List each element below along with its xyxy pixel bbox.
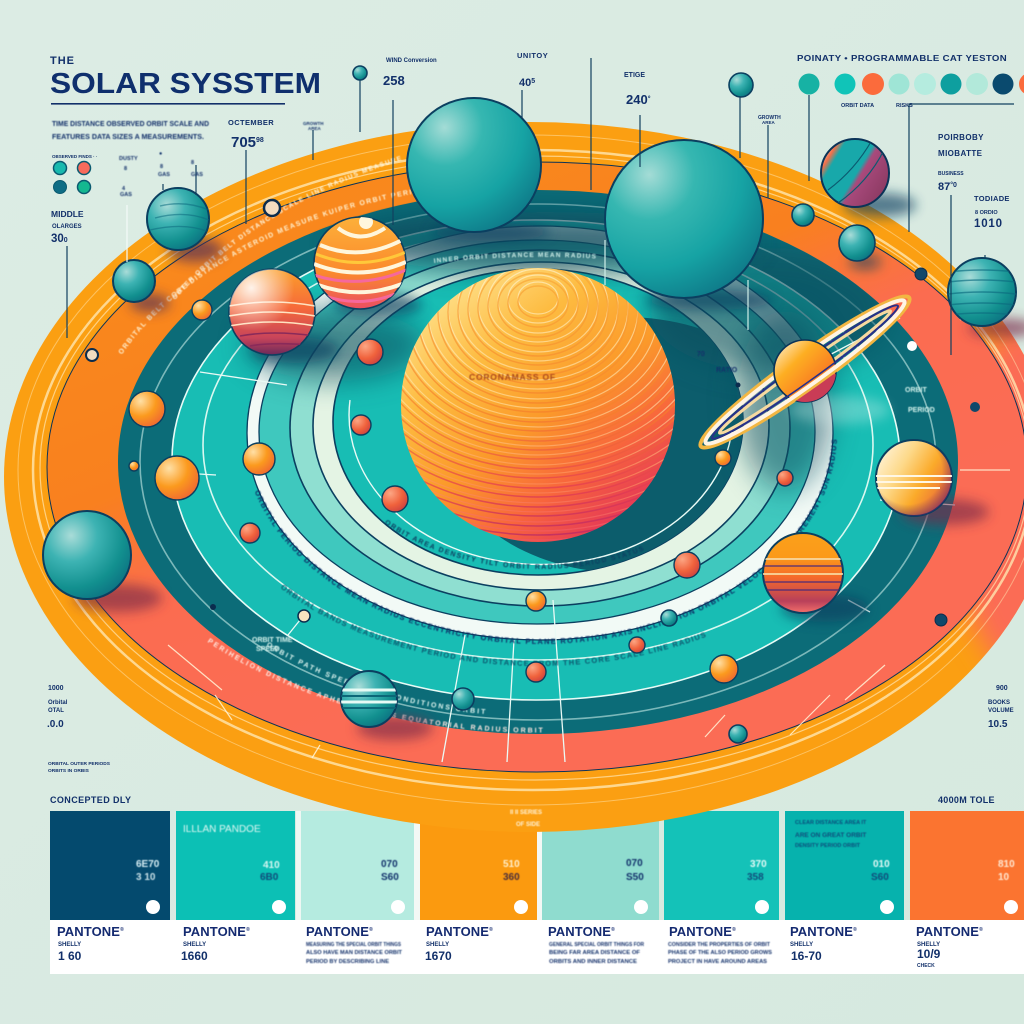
pantone labels: SHELLY [58,942,81,948]
leader lines [67,58,1014,355]
title block [50,55,321,105]
coral right edge [958,321,1024,662]
ring labels: INNER ORBIT DISTANCE MEAN RADIUS [433,252,596,264]
callout: near far right label [758,115,781,125]
lower left callout: OTAL [48,708,64,714]
planet: striped teal and magenta [821,139,889,207]
callout: 240: ETIGE [624,72,645,79]
planet: large teal lower left [43,511,131,599]
pantone labels: ORBITS AND INNER DISTANCE [549,959,637,965]
lower left callout [47,685,111,774]
swatch inner labels [183,820,867,849]
intro text: TIME DISTANCE OBSERVED ORBIT SCALE AND [52,119,210,128]
title block: SOLAR SYSSTEM [50,68,321,100]
ring labels: PERIHELION DISTANCE APHELION MASS EQUATORIAL RADIUS ORBIT [207,638,544,734]
lower right callout: 900 [996,685,1008,692]
swatch numbers: 6B0 [260,872,279,883]
pantone labels: SHELLY [917,942,940,948]
swatch numbers: 510 [503,859,520,870]
pantone labels: ALSO HAVE MAN DISTANCE ORBIT [306,950,403,956]
pantone labels: SHELLY [183,942,206,948]
panel: pantone swatch row [50,811,1024,974]
small coral moons [240,339,793,682]
pantone labels: PHASE OF THE ALSO PERIOD GROWS [668,950,772,956]
ring labels: OUTER ORBIT BELT DISTANCE SCALE LINE RADIUS MEASURE [172,155,402,300]
pantone labels: CHECK [917,963,935,969]
small ring text: ORBIT TIME [252,637,293,644]
swatch numbers: 070 [381,859,398,870]
callout: 45 [517,51,548,89]
pantone labels: 16-70 [791,949,822,963]
callout: 258: WIND Conversion [386,58,437,64]
pantone labels: PANTONE [916,924,979,939]
outer orange ring [4,122,1024,832]
soft shadows on rings [245,212,890,490]
callout: right: POIRBOBY [938,133,984,142]
pale teal ring [290,250,790,606]
inner orange and coral band [47,162,1024,772]
swatch numbers: 360 [503,872,520,883]
callout: near far right label: AREA [762,120,776,125]
bottom band ticks [510,810,542,828]
outer ring stripes [18,135,1024,805]
left data callout: MIDDLE [51,209,84,219]
swatch headings: CONCEPTED DLY [50,795,131,805]
top left icons labels: 8 [160,164,163,170]
top left icons labels: 4 [122,186,126,192]
swatch inner labels: ILLLAN PANDOE [183,824,261,835]
callout: right: MIOBATTE [938,149,983,158]
small legend: OBSERVED FINDS · · [52,154,97,159]
swatch inner labels: ARE ON GREAT ORBIT [795,832,866,839]
planet: large teal left [407,98,541,232]
pantone labels: PROJECT IN HAVE AROUND AREAS [668,959,767,965]
swatch numbers: 370 [750,859,767,870]
callout: 258: 258 [383,73,405,88]
callout: 705: 705 [231,134,256,151]
turquoise ring [172,220,900,700]
small teal moons [353,66,875,743]
pantone labels: ® [853,926,857,933]
pantone labels: ® [732,926,736,933]
pantone labels: PERIOD BY DESCRIBING LINE [306,959,389,965]
color legend top right: ORBIT DATA [841,103,874,109]
dark teal disc [118,190,958,734]
pantone labels: 1670 [425,949,452,963]
callout: 258 [383,58,437,88]
bottom band ticks: II II SERIES [510,810,542,816]
planet: small teal left [113,260,155,302]
callout: near far right label: GROWTH [758,115,781,121]
lower right callout: 10.5 [988,719,1008,730]
pantone labels: SHELLY [790,942,813,948]
swatch numbers: 10 [998,872,1010,883]
pantone labels: PANTONE [790,924,853,939]
pantone labels: ® [120,926,124,933]
lower left callout: 1000 [48,685,64,692]
band separators [168,300,1010,758]
callout: 240: ° [648,95,651,103]
sun [401,268,675,542]
swatch numbers: 010 [873,859,890,870]
planet shadows [74,193,1024,740]
left data callout: OLARGES [52,224,82,230]
small legend [52,154,97,194]
callout: right: BUSINESS [938,171,964,177]
inner turquoise [333,269,743,575]
pantone labels: 10/9 [917,947,941,961]
planet: pale orange right [876,440,952,516]
callout: right: °0 [950,181,957,189]
swatch headings [50,795,995,805]
callout: 705 [228,118,274,151]
small ring text: ORBIT [905,387,928,394]
callout: far right: 8 ORDIO [975,210,998,216]
ring labels [118,155,838,734]
title block: THE [50,55,75,67]
pantone labels: MEASURING THE SPECIAL ORBIT THINGS [306,942,401,948]
top left icons labels: AREA [308,126,322,131]
top left icons labels: GROWTH [303,121,324,126]
top left icons labels: GAS [191,172,203,178]
saturn with rings [698,294,912,450]
small ring text: SPEED [256,646,280,653]
white label band [247,226,833,640]
left data callout: 300 [51,233,68,245]
pantone labels: BEING FAR AREA DISTANCE OF [549,950,641,956]
left data callout [51,209,84,245]
swatch numbers: 358 [747,872,764,883]
lower right callout: VOLUME [988,708,1014,714]
pantone labels: PANTONE [306,924,369,939]
swatch numbers: S50 [626,872,644,883]
planet: large teal right [605,140,763,298]
pantone labels: PANTONE [548,924,611,939]
planet: banded lower right [763,533,843,613]
swatch headings: 4000M TOLE [938,795,995,805]
lower left callout: ORBITAL OUTER PERIODS [48,761,111,767]
radial spokes [165,318,955,762]
orbital system [4,122,1024,832]
ring labels: ORBIT PATH SPEED FTEE CONDITIONS ORBIT [266,642,486,714]
callout: far right: TODIADE [974,194,1010,203]
small ring text [252,351,935,653]
small ring text: PERIOD [908,407,935,414]
dark shadow around sun [498,318,743,570]
planet: teal striped right [948,258,1016,326]
pantone labels: PANTONE [669,924,732,939]
pantone labels: ® [979,926,983,933]
ring labels: ORBIT AREA DENSITY TILT ORBIT RADIUS PERIOD STATUS [385,520,644,570]
pantone labels: 1660 [181,949,208,963]
sun label: CORONAMASS OF [469,372,556,382]
top left icons labels: 8 [191,160,194,166]
swatch numbers: S60 [871,872,889,883]
swatch inner labels: CLEAR DISTANCE AREA IT [795,820,867,826]
white inner arc [349,400,732,564]
planet: teal upper left [147,188,209,250]
small ring text: 70 [697,351,705,358]
top left icons labels: DUSTY [119,156,138,162]
pantone labels [57,924,983,969]
lower left callout: .0.0 [47,719,64,730]
lower left callout: ORBITS IN ORBIS [48,768,90,774]
swatch numbers: 6E70 [136,859,160,870]
swatch numbers: S60 [381,872,399,883]
pantone labels: ® [611,926,615,933]
callout: 705: 98 [256,137,264,144]
color legend top right: POINATY • PROGRAMMABLE CAT YESTON [797,54,1007,63]
pantone labels: GENERAL SPECIAL ORBIT THINGS FOR [549,942,644,948]
sun stripes [401,268,675,540]
callout: 240: 240 [626,92,648,107]
light turquoise ring [259,240,815,624]
top left icons labels: 8 [124,166,127,172]
callout: far right: 1010 [974,218,1003,230]
swatch numbers: 410 [263,860,280,871]
pantone labels: PANTONE [183,924,246,939]
swatch numbers: 810 [998,859,1015,870]
swatch numbers: 070 [626,858,643,869]
top left icons labels: GAS [120,192,132,198]
planet: banded orange upper [314,215,406,309]
color legend top right: RISKS [896,103,913,109]
swatch inner labels: DENSITY PERIOD ORBIT [795,843,861,849]
callout: 45: UNITOY [517,51,548,60]
ring labels: ORBITAL BELT CORE DISTANCE ASTEROID MEASURE KUIPER ORBIT PERIOD [118,189,412,354]
intro text [52,119,210,141]
pantone labels: PANTONE [57,924,120,939]
pantone labels: ® [246,926,250,933]
lower right callout: BOOKS [988,700,1010,706]
lower left callout: Orbital [48,700,68,706]
callout: far right [974,194,1010,230]
pantone labels: PANTONE [426,924,489,939]
cream ring [313,262,769,590]
bottom band ticks: OF SIDE [516,822,540,828]
top left icons labels: ● [159,151,162,157]
ring thin lines [140,204,936,720]
swatch numbers [136,858,1015,883]
callout: 705: OCTEMBER [228,118,274,127]
lower right callout [988,685,1014,730]
small ring text: RATIO [716,367,738,374]
callout: right [938,133,984,193]
marker dots [86,200,980,626]
planet: teal striped bottom [341,671,397,727]
pantone labels: ® [489,926,493,933]
callout: 240 [624,72,651,107]
ring labels: ORBITAL BANDS MEASUREMENT PERIOD AND DISTANCE FROM THE CORE SCALE LINE RADIUS [280,584,706,666]
pantone labels: CONSIDER THE PROPERTIES OF ORBIT [668,942,771,948]
swatch numbers: 3 10 [136,872,156,883]
callout: 45: 40 [519,77,531,89]
color legend top right [797,54,1024,109]
callout: 45: 5 [531,78,535,85]
pantone labels: SHELLY [426,942,449,948]
pantone labels: 1 60 [58,949,82,963]
callout: right: 87 [938,181,950,193]
ring labels: ORBITAL PERIOD DISTANCE MEAN RADIUS ECCENTRICITY ORBITAL PLANE ROTATION AXIS INCLINATION ORBITAL VELOCITY MEASUREMENT SUN RADIUS MASS DENSITY TILT [254,438,838,645]
pantone labels: ® [369,926,373,933]
planet: banded coral [229,269,315,355]
top left icons labels: GAS [158,172,170,178]
top left icons labels [119,121,324,198]
small ring text: ORBIT [420,393,442,400]
sun body [401,268,675,542]
intro text: FEATURES DATA SIZES A MEASUREMENTS. [52,132,204,141]
small orange moons [129,300,738,683]
